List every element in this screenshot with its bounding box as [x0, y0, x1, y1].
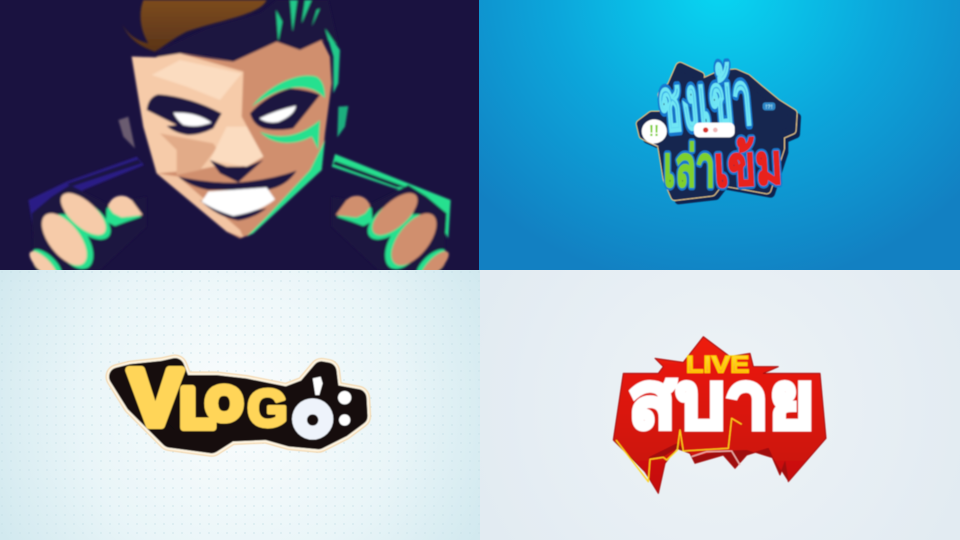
left eye socket [147, 94, 222, 135]
right fingers [336, 186, 453, 283]
logo backing drop shadow [645, 71, 797, 200]
VLOG wordmark: G [247, 379, 288, 437]
face light side [132, 53, 263, 173]
right fist knuckles [332, 185, 447, 270]
red emblem [613, 337, 826, 493]
teeth [202, 187, 275, 216]
icon: exclamation speech bubble [642, 119, 667, 147]
left fist knuckles [32, 185, 147, 270]
black backing [118, 367, 358, 444]
panel: esports mascot [0, 0, 480, 286]
icon: white ring [292, 398, 333, 440]
mouth upper [178, 171, 297, 190]
right fist green [337, 191, 452, 286]
icon: white dots [338, 391, 351, 426]
panel: blue talk-show logo [479, 0, 960, 270]
logo gold rim [641, 67, 793, 196]
right shoulder band [332, 154, 451, 238]
icon: small question bubble [763, 102, 775, 110]
LIVE heading: LIVE [686, 351, 749, 378]
left shoulder band [28, 157, 144, 240]
green face marks [247, 76, 325, 237]
logo backing navy [641, 67, 793, 196]
icon: exclamation speech bubble: !! [649, 123, 659, 140]
icon: small question bubble: !?! [765, 104, 773, 110]
headline accent: เข้ม [712, 132, 784, 199]
heartbeat line pale tail [692, 451, 740, 465]
lower left light jaw [157, 173, 243, 237]
right ear green [337, 106, 348, 137]
headline accent outline: เข้ม [712, 132, 784, 199]
right eye white [259, 106, 296, 123]
hair dark [155, 0, 338, 62]
logo artwork [118, 353, 358, 444]
left cheek shadow [160, 133, 217, 175]
panel: vlog logo [0, 270, 480, 540]
left fist green [26, 191, 142, 286]
cream rim [118, 367, 358, 444]
VLOG wordmark: V [129, 353, 182, 442]
icon: typing speech bubble [694, 123, 735, 137]
shoulder dark stripes [67, 159, 405, 187]
logo artwork [641, 58, 797, 200]
dotted texture [0, 270, 480, 540]
cheek lower tan [177, 173, 297, 238]
VLOG wordmark: O [206, 377, 242, 429]
left eye white [173, 113, 212, 126]
hair green highlights [276, 0, 340, 93]
icon: white exclamation mark [313, 377, 323, 395]
headline line two outline: เล่า [663, 135, 715, 198]
logo artwork [613, 337, 826, 493]
mascot artwork [26, 0, 453, 286]
icon: O counter [218, 398, 228, 408]
dark lower edge [648, 443, 788, 482]
right fist [332, 185, 453, 286]
VLOG wordmark: L [180, 377, 215, 440]
tan rim [118, 367, 358, 444]
hair brown [122, 0, 267, 52]
left ear grey [118, 117, 135, 148]
right eye socket [250, 88, 320, 130]
nose highlight [210, 127, 263, 167]
mouth lower [200, 200, 267, 221]
headline line two: เล่า [663, 135, 715, 198]
face base [132, 40, 332, 238]
forehead highlight [152, 60, 242, 100]
headline line one outline: ชงเข้า [655, 58, 755, 148]
panel: live red logo [480, 270, 960, 540]
headline line one: ชงเข้า [655, 58, 755, 148]
heartbeat line [616, 418, 742, 482]
left fingers [26, 186, 143, 283]
main wordmark: สบาย [628, 357, 814, 445]
nose shadow [210, 160, 263, 182]
